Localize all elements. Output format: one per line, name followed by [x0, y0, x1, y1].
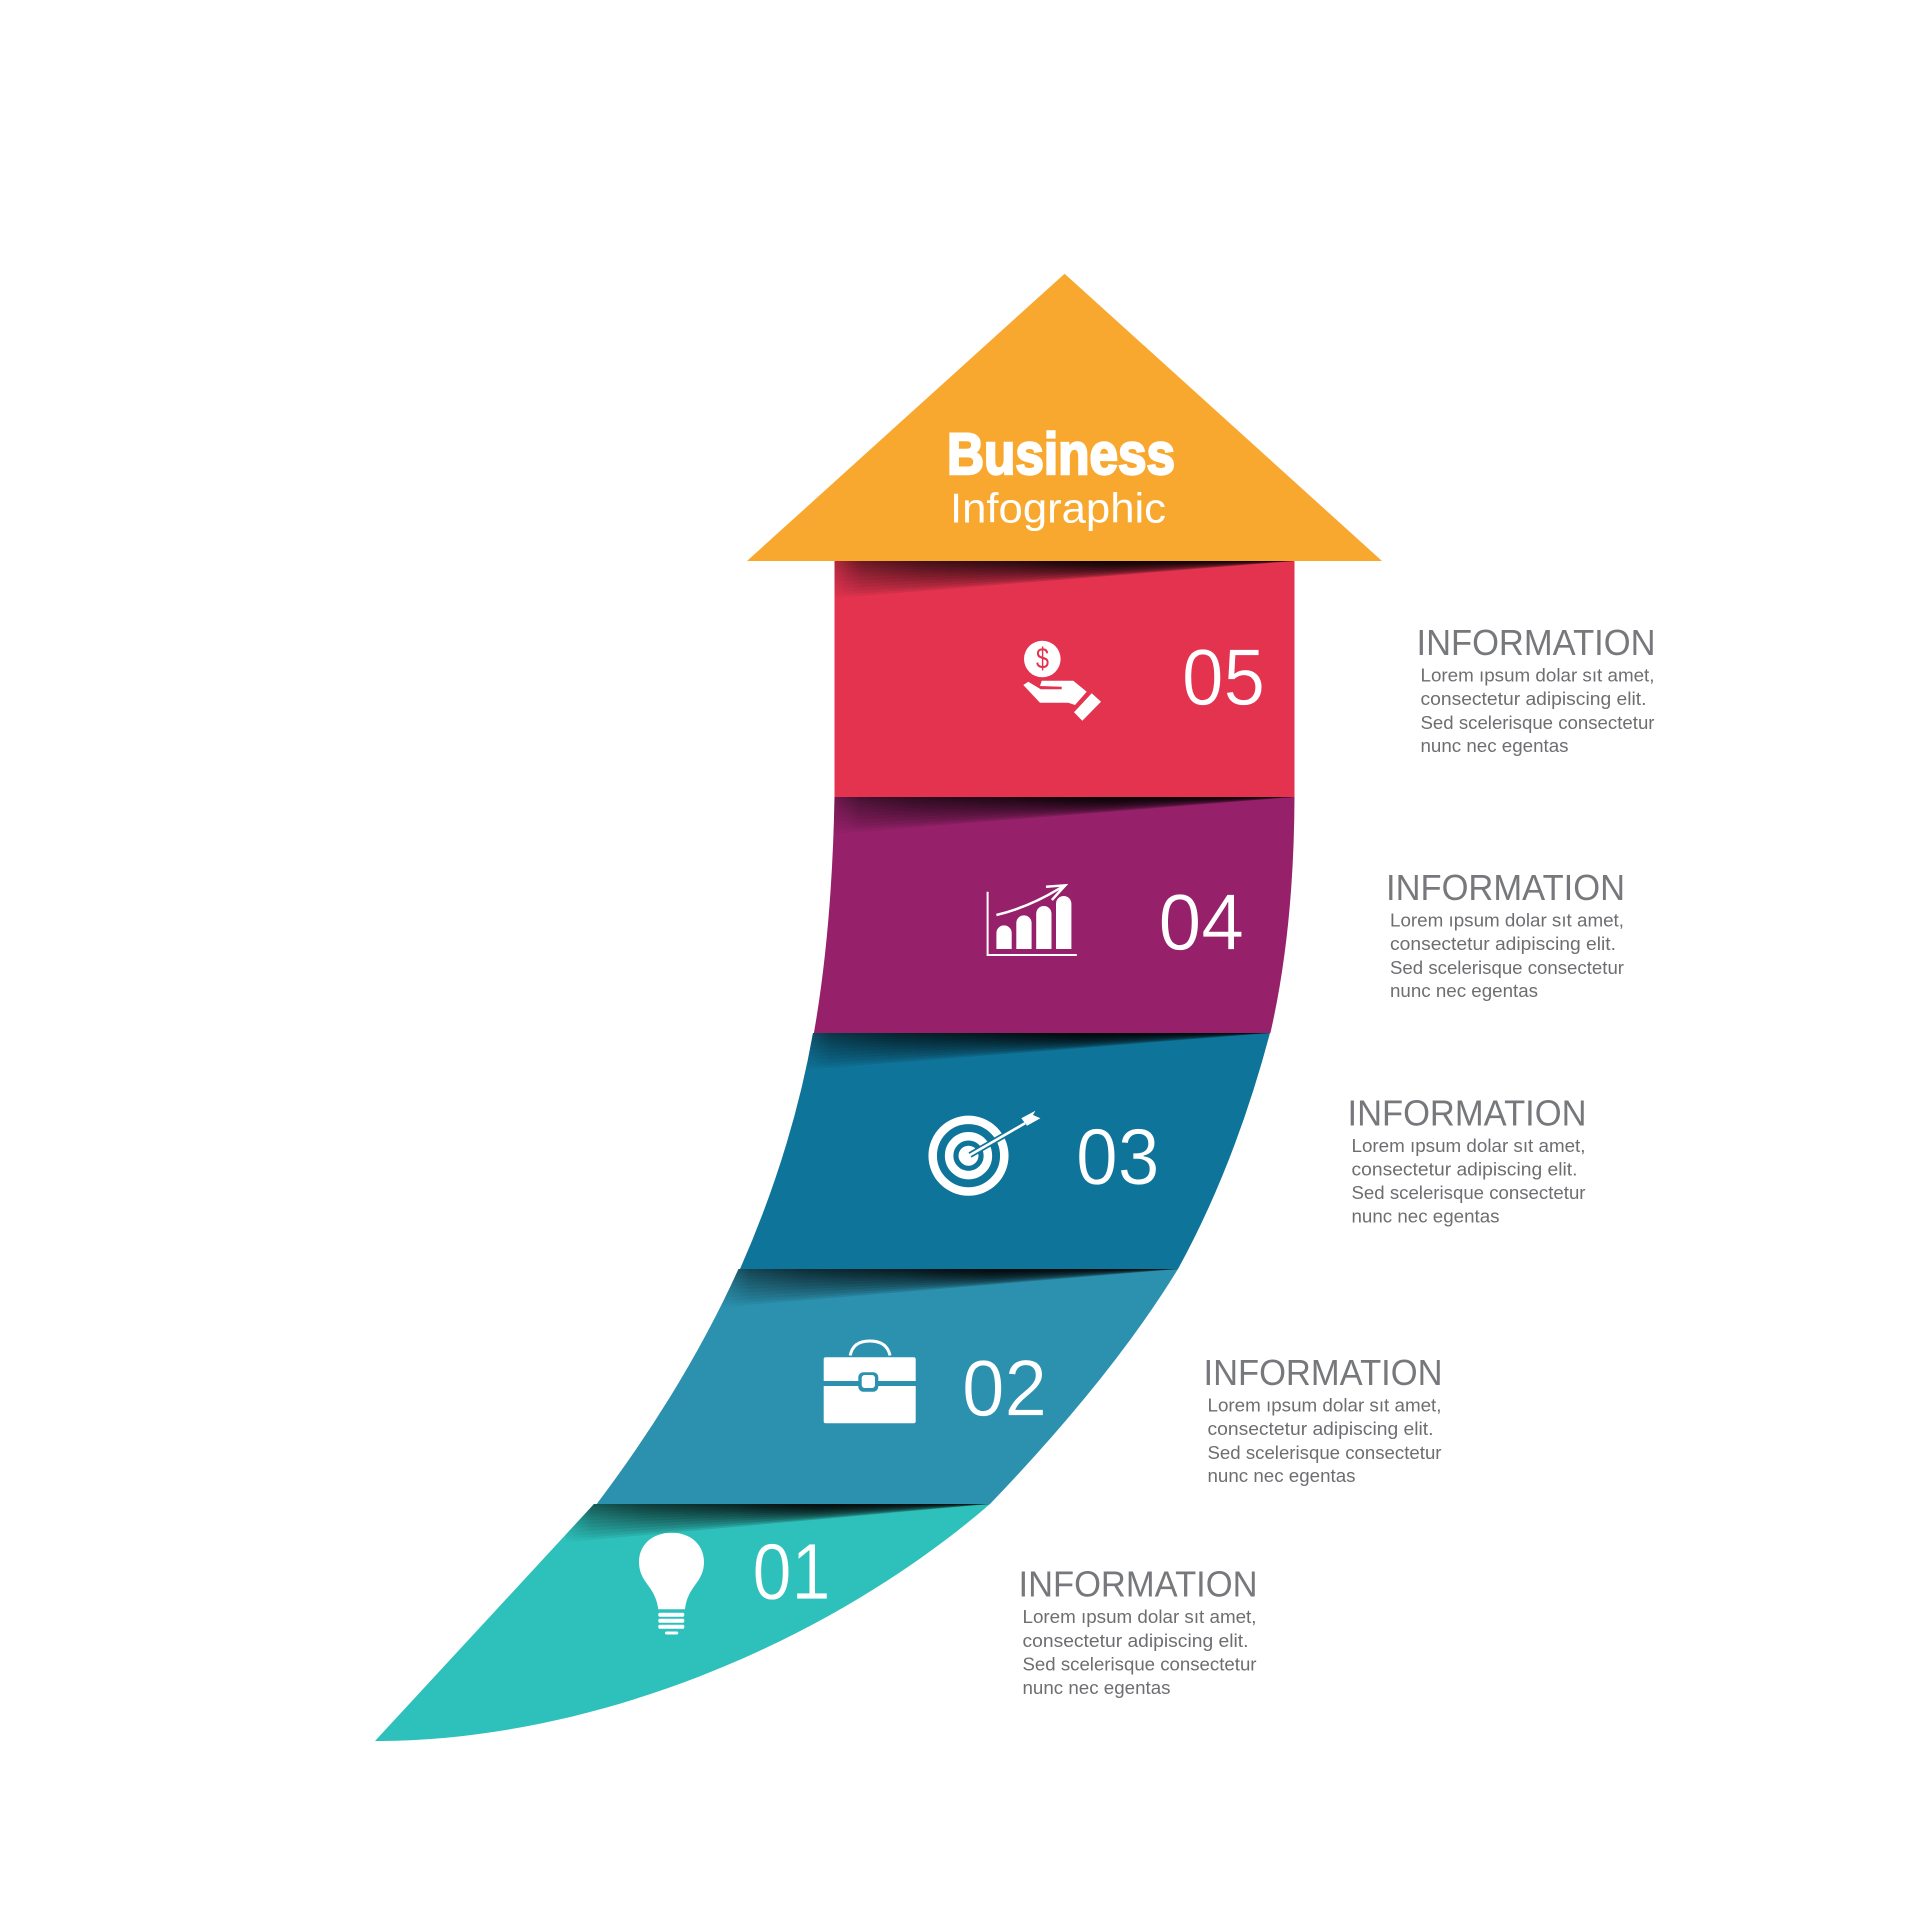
text block: information 04: Sed scelerisque consectetur — [1390, 957, 1624, 978]
panel: band 02 mid blue — [597, 1269, 1178, 1504]
text block: information 04 — [1386, 867, 1625, 1001]
text block: information 02 — [1204, 1352, 1442, 1486]
text block: information 04: Lorem ıpsum dolar sıt amet, — [1390, 910, 1624, 930]
number 02: 02 — [962, 1344, 1047, 1433]
text block: information 02: nunc nec egentas — [1208, 1465, 1356, 1486]
text block: information 03: INFORMATION — [1348, 1092, 1586, 1133]
text block: information 02: consectetur adipiscing elit. — [1208, 1418, 1434, 1439]
number 05: 05 — [1182, 633, 1265, 722]
text block: information 02: Lorem ıpsum dolar sıt amet, — [1208, 1394, 1442, 1416]
text block: information 03: Sed scelerisque consectetur — [1352, 1182, 1586, 1203]
text block: information 05 — [1416, 622, 1656, 756]
text block: information 05: consectetur adipiscing elit. — [1420, 688, 1646, 709]
title: Business — [947, 422, 1175, 487]
title — [947, 422, 1175, 532]
panel: band 03 deep blue — [740, 1033, 1270, 1269]
icon: bar chart with arrow — [988, 885, 1077, 955]
text block: information 01: nunc nec egentas — [1022, 1677, 1170, 1698]
text block: information 01: consectetur adipiscing elit. — [1022, 1630, 1248, 1651]
icon: hand with coin — [1023, 641, 1101, 721]
text block: information 01 — [1018, 1564, 1258, 1698]
text block: information 03 — [1348, 1092, 1586, 1226]
text block: information 03: nunc nec egentas — [1352, 1205, 1500, 1226]
text block: information 05: INFORMATION — [1416, 622, 1656, 663]
text block: information 04: consectetur adipiscing elit. — [1390, 933, 1616, 954]
text block: information 04: INFORMATION — [1386, 867, 1625, 908]
icon: target with dart — [933, 1111, 1040, 1191]
text block: information 02: Sed scelerisque consectetur — [1208, 1442, 1442, 1463]
title: Infographic — [950, 484, 1166, 532]
panel: band 01 teal — [375, 1504, 990, 1741]
text block: information 01: INFORMATION — [1018, 1564, 1258, 1605]
icon: light bulb — [639, 1533, 704, 1634]
icon: briefcase — [824, 1341, 916, 1423]
text block: information 01: Lorem ıpsum dolar sıt amet, — [1022, 1606, 1256, 1627]
panel: band 04 purple — [814, 797, 1294, 1033]
panel: band 05 red — [834, 561, 1294, 797]
number 03: 03 — [1076, 1112, 1160, 1201]
text block: information 05: nunc nec egentas — [1420, 735, 1568, 756]
arrow head — [747, 274, 1382, 561]
text block: information 04: nunc nec egentas — [1390, 980, 1538, 1001]
number 04: 04 — [1158, 877, 1244, 966]
number 01: 01 — [752, 1527, 830, 1616]
text block: information 01: Sed scelerisque consectetur — [1022, 1653, 1256, 1674]
text block: information 05: Sed scelerisque consectetur — [1420, 712, 1654, 733]
text block: information 02: INFORMATION — [1204, 1352, 1442, 1393]
text block: information 05: Lorem ıpsum dolar sıt amet, — [1420, 664, 1654, 686]
text block: information 03: Lorem ıpsum dolar sıt amet, — [1352, 1135, 1586, 1156]
text block: information 03: consectetur adipiscing elit. — [1352, 1158, 1578, 1179]
icon: hand with coin: $ — [1036, 643, 1049, 676]
